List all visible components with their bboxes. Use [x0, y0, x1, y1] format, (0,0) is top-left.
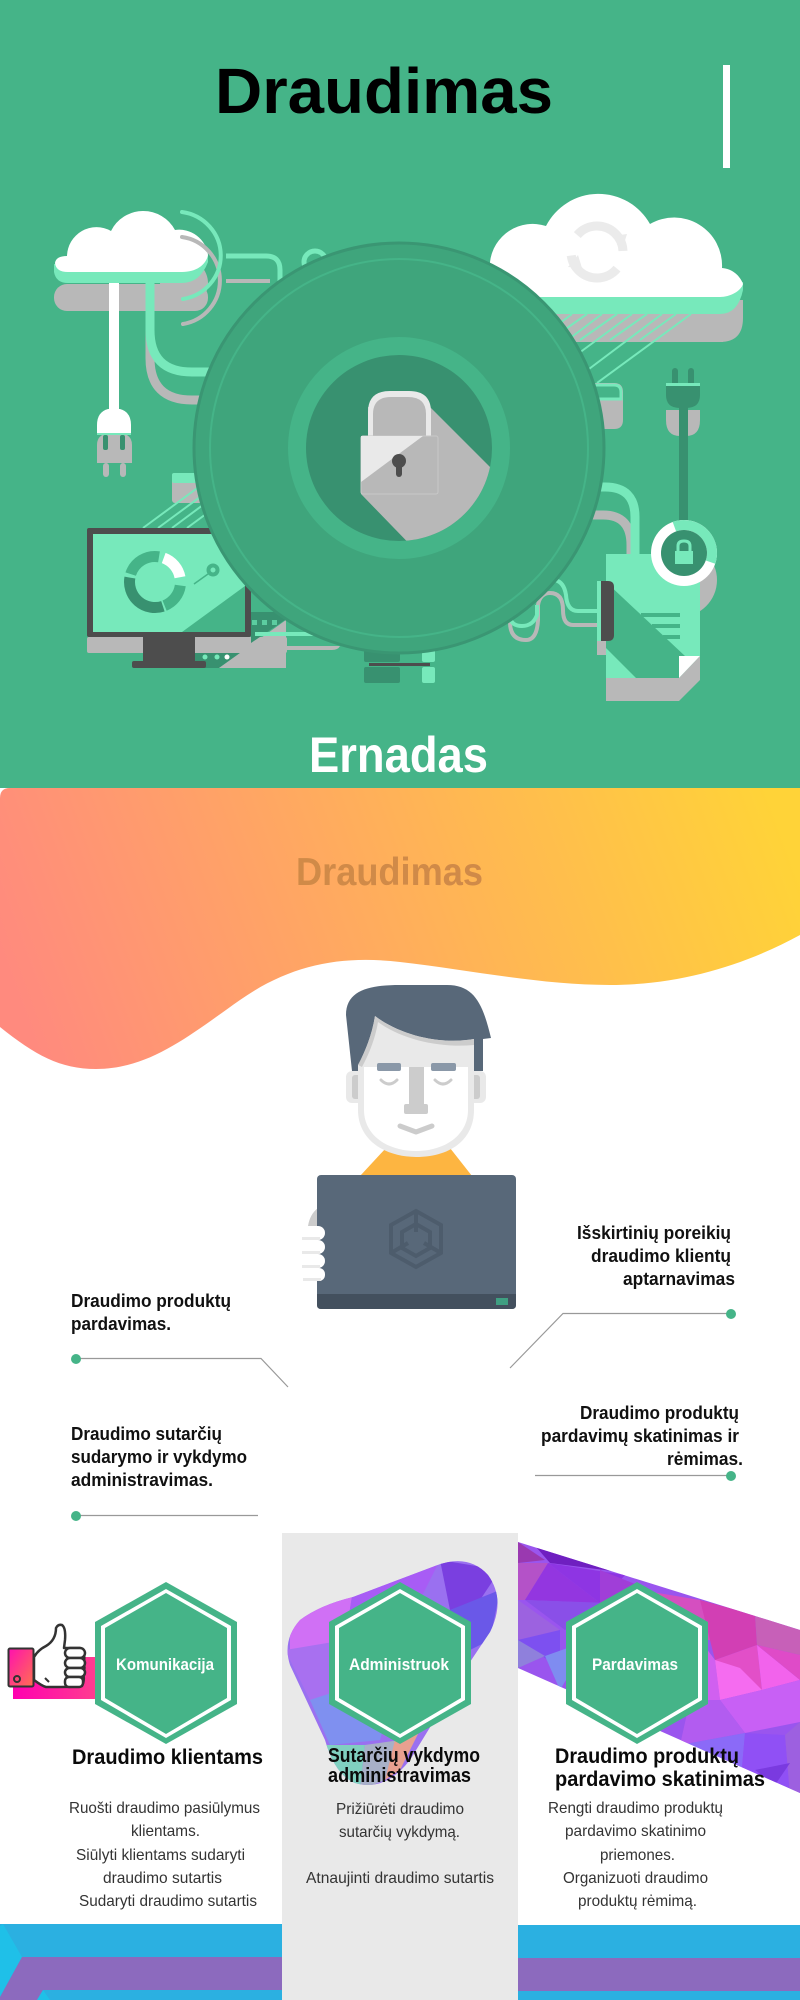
column: contract administration: Prižiūrėti draudimo — [336, 1801, 464, 1818]
column: sales promotion: Organizuoti draudimo — [563, 1870, 708, 1887]
callout: contract administration: administravimas. — [71, 1470, 213, 1490]
hexagon: administration — [329, 1582, 471, 1744]
chart: donut — [130, 556, 180, 608]
hexagon: sales: Pardavimas — [592, 1655, 678, 1674]
column: contract administration: Atnaujinti draudimo sutartis — [306, 1870, 494, 1887]
callout: client service: Išskirtinių poreikių — [577, 1223, 731, 1243]
callout: contract administration — [71, 1424, 258, 1521]
column: sales promotion: Rengti draudimo produktų — [548, 1800, 723, 1817]
illustration: right plug — [666, 368, 700, 525]
callout: promotion: rėmimas. — [667, 1449, 743, 1469]
illustration: hatch and small box left — [143, 473, 225, 528]
column: sales promotion — [548, 1745, 765, 1910]
panel: centre grey column — [282, 1533, 518, 2000]
callout: promotion: Draudimo produktų — [580, 1403, 739, 1423]
bottom bands right — [518, 1925, 800, 2000]
panel: cover background — [0, 0, 800, 788]
illustration: base under circle — [364, 645, 435, 683]
column: for clients: Siūlyti klientams sudaryti — [76, 1847, 245, 1864]
column: for clients: draudimo sutartis — [103, 1870, 222, 1887]
column: contract administration: administravimas — [328, 1765, 471, 1787]
callout: client service: draudimo klientų — [591, 1246, 731, 1266]
column: sales promotion: pardavimo skatinimo — [565, 1823, 706, 1840]
illustration: monitor — [87, 528, 340, 668]
column: sales promotion: pardavimo skatinimas — [555, 1768, 765, 1791]
callout: product sales: pardavimas. — [71, 1314, 171, 1334]
column: contract administration: Sutarčių vykdymo — [328, 1745, 480, 1767]
callout: promotion: pardavimų skatinimas ir — [541, 1426, 739, 1446]
callout: client service — [510, 1223, 736, 1368]
white vertical bar — [723, 65, 730, 168]
icon: big lock circle — [194, 243, 604, 653]
column: for clients: Sudaryti draudimo sutartis — [79, 1893, 257, 1910]
callout: product sales: Draudimo produktų — [71, 1291, 231, 1311]
hexagon: communication: Komunikacija — [116, 1655, 214, 1674]
illustration: cloud left — [54, 211, 326, 477]
decoration: low-poly stripe — [518, 1540, 800, 1800]
panel: gradient wave — [0, 788, 800, 1069]
decoration: low-poly blob — [288, 1561, 498, 1785]
illustration: document — [597, 520, 717, 701]
author name: Ernadas — [309, 727, 488, 783]
column: sales promotion: priemones. — [600, 1847, 675, 1864]
column: for clients: Ruošti draudimo pasiūlymus — [69, 1800, 260, 1817]
column: sales promotion: produktų rėmimą. — [578, 1893, 697, 1910]
illustration: cloud right — [480, 194, 743, 429]
column: for clients — [69, 1746, 263, 1910]
icon: thumbs up — [8, 1625, 95, 1699]
callout: product sales — [71, 1291, 288, 1387]
column: sales promotion: Draudimo produktų — [555, 1745, 739, 1768]
hexagon: communication — [95, 1582, 237, 1744]
column: contract administration: sutarčių vykdymą. — [339, 1824, 460, 1841]
title: Draudimas — [215, 55, 553, 127]
callout: contract administration: sudarymo ir vykdymo — [71, 1447, 247, 1467]
callout: contract administration: Draudimo sutarčių — [71, 1424, 222, 1444]
callout: promotion — [535, 1403, 743, 1481]
column: for clients: klientams. — [131, 1823, 200, 1840]
illustration: person with laptop — [302, 985, 516, 1309]
illustration: wires right — [510, 487, 635, 640]
icon: lock badge — [651, 520, 717, 586]
column: contract administration — [306, 1745, 494, 1887]
hexagon: sales — [566, 1582, 708, 1744]
hexagon: administration: Administruok — [349, 1655, 449, 1674]
column: for clients: Draudimo klientams — [72, 1746, 263, 1769]
callout: client service: aptarnavimas — [623, 1269, 735, 1289]
bottom bands left — [0, 1924, 282, 2000]
section heading: Draudimas — [296, 851, 483, 894]
